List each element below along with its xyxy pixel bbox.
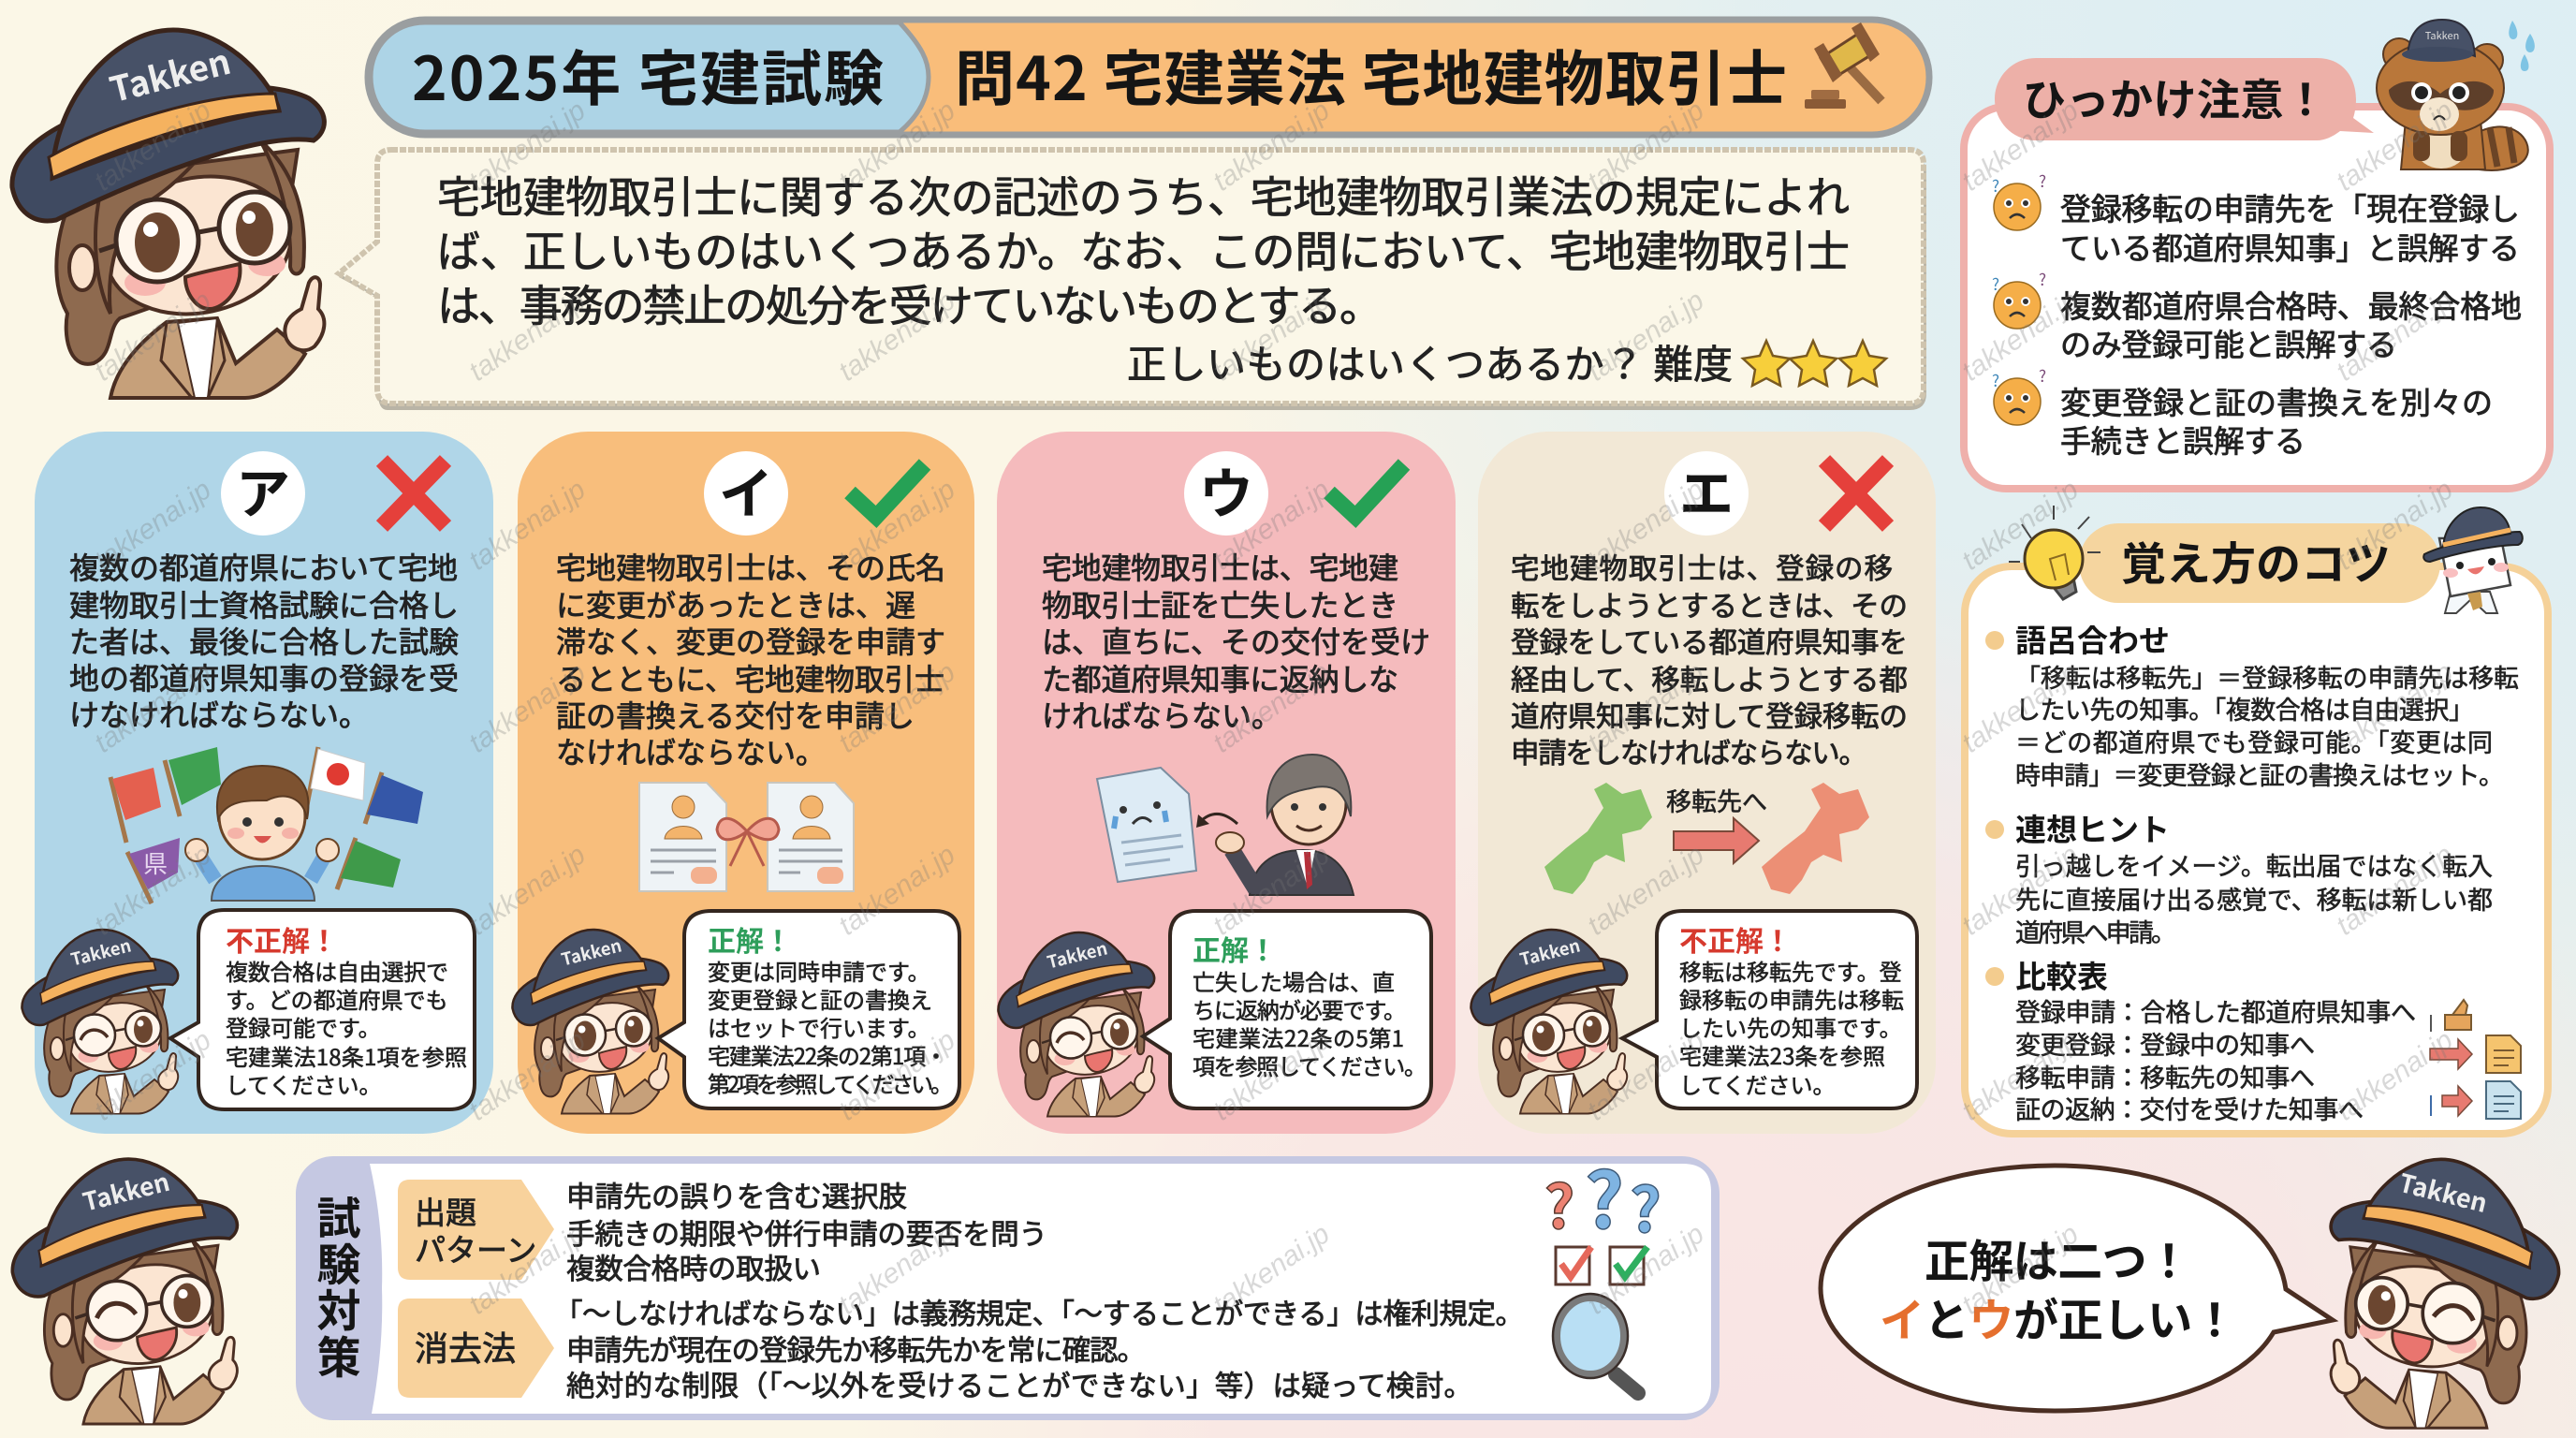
item: trap 1: ている都道府県知事」と誤解する: [2060, 224, 2520, 269]
watermarks: takkenai.jp: [89, 839, 217, 942]
character: bottom-left mascot: Takken: [79, 1162, 173, 1219]
explanation bubble: 不正解！: [1679, 918, 1792, 960]
pattern list: 手続きの期限や併行申請の要否を問う: [566, 1211, 1047, 1253]
mascot: wink: [22, 930, 178, 1114]
statement text: [556, 545, 945, 772]
icon: worried face: ?: [2039, 169, 2046, 192]
explanation bubble: 変更は同時申請です。: [708, 954, 930, 987]
item: trap 3: [1992, 363, 2493, 462]
question text: ば、正しいものはいくつあるか。なお、この問において、宅地建物取引士: [437, 218, 1850, 280]
watermarks: takkenai.jp: [1956, 656, 2085, 759]
watermarks: takkenai.jp: [1208, 1218, 1336, 1321]
vertical heading: 試: [316, 1182, 361, 1247]
tag: elimination: [398, 1299, 554, 1398]
icon: question marks and checkboxes: ?: [1544, 1160, 1574, 1246]
statement text: [69, 545, 459, 735]
watermarks: takkenai.jp: [1208, 285, 1336, 388]
tip: wordplay: [1985, 616, 2519, 792]
icon: worried face: ?: [1992, 271, 1999, 295]
illustration: two certificates with ribbon: [639, 783, 854, 891]
watermarks: takkenai.jp: [89, 656, 217, 759]
illustration: boy with prefectural flags: 県: [143, 845, 168, 880]
icon: worried face: [1992, 169, 2046, 230]
watermarks: takkenai.jp: [1582, 656, 1710, 759]
explanation bubble: [1143, 911, 1431, 1108]
watermarks: takkenai.jp: [833, 656, 961, 759]
tag: question patterns: パターン: [415, 1225, 536, 1270]
item: trap 2: 複数都道府県合格時、最終合格地: [2060, 282, 2522, 327]
icon: gavel: [1805, 22, 1881, 109]
watermarks: takkenai.jp: [1582, 1024, 1710, 1127]
icon: worried face: [1992, 267, 2046, 329]
watermarks: takkenai.jp: [2331, 285, 2459, 388]
statement text: [1511, 546, 1908, 771]
explanation bubble: [170, 910, 475, 1109]
character: top-left mascot: Takken: [104, 34, 235, 112]
watermarks: takkenai.jp: [89, 285, 217, 388]
icon: worried face: ?: [2039, 267, 2046, 290]
explanation bubble: 第2項を参照してください。: [708, 1066, 953, 1099]
mascot: open eyes: [1471, 930, 1627, 1114]
watermarks: takkenai.jp: [1208, 839, 1336, 942]
tag: question patterns: 出題: [415, 1188, 476, 1233]
watermarks: takkenai.jp: [833, 1218, 961, 1321]
watermarks: takkenai.jp: [1208, 656, 1336, 759]
icon: green check: [850, 464, 925, 517]
vertical heading: 策: [316, 1322, 361, 1387]
character: bottom-right mascot: [2331, 1159, 2559, 1428]
statement text: は、直ちに、その交付を受け: [1042, 619, 1430, 662]
statement text: 道府県知事に対して登録移転の: [1511, 694, 1908, 735]
statement text: るとともに、宅地建物取引士: [556, 656, 944, 699]
elimination list: 「～しなければならない」は義務規定、「～することができる」は権利規定。: [554, 1291, 1524, 1332]
question text: は、事務の禁止の処分を受けていないものとする。: [437, 272, 1383, 334]
statement text: けなければならない。: [69, 692, 369, 735]
icon: worried face: ?: [1992, 173, 1999, 197]
mascot: wink: [998, 932, 1154, 1116]
pattern list: [566, 1174, 1047, 1287]
illustration: lost certificate and official: [1097, 755, 1354, 895]
explanation bubble: してください。: [1679, 1067, 1836, 1100]
statement text: た都道府県知事に返納しな: [1042, 656, 1398, 699]
icon: cube mascot: [2423, 507, 2523, 613]
statement text: 登録をしている都道府県知事を: [1511, 620, 1908, 661]
explanation bubble: 正解！: [708, 918, 792, 960]
watermarks: takkenai.jp: [463, 95, 592, 198]
tip: wordplay: したい先の知事。「複数合格は自由選択」: [2015, 690, 2474, 726]
card label エ: [1664, 450, 1749, 536]
statement text: 申請をしなければならない。: [1511, 730, 1867, 771]
tag: elimination: 消去法: [415, 1322, 516, 1371]
question text: 宅地建物取引士に関する次の記述のうち、宅地建物取引業法の規定によれ: [437, 164, 1850, 226]
explanation bubble: す。どの都道府県でも: [226, 982, 448, 1015]
tip: wordplay: ＝どの都道府県でも登録可能。「変更は同: [2015, 723, 2493, 759]
watermarks: takkenai.jp: [1208, 95, 1336, 198]
item: trap 3: 手続きと誤解する: [2060, 417, 2305, 462]
watermarks: takkenai.jp: [463, 285, 592, 388]
statement text: 証の書換える交付を申請し: [556, 693, 915, 736]
vertical heading: 験: [316, 1229, 361, 1294]
panel: exam strategy: [296, 1139, 1720, 1420]
panel: card イ: [512, 432, 974, 1134]
mascot: wink: Takken: [68, 932, 134, 972]
vertical heading: 対: [316, 1275, 361, 1340]
watermarks: takkenai.jp: [1582, 839, 1710, 942]
item: trap 1: 登録移転の申請先を「現在登録し: [2060, 184, 2520, 229]
statement text: 転をしようとするときは、その: [1511, 583, 1908, 624]
tip: comparison table: 移転申請：移転先の知事へ: [2015, 1058, 2315, 1094]
panel: caution traps: [1964, 20, 2550, 489]
illustration: boy with prefectural flags: [110, 747, 423, 903]
icon: red cross: [382, 461, 446, 526]
question text: [437, 164, 1850, 334]
explanation bubble: はセットで行います。: [708, 1010, 930, 1043]
statement text: ければならない。: [1042, 693, 1281, 736]
watermarks: takkenai.jp: [833, 95, 961, 198]
icon: thumb up: [2431, 1000, 2471, 1032]
watermarks: takkenai.jp: [2331, 474, 2459, 577]
mascot: open eyes: Takken: [1517, 932, 1583, 972]
tips heading pill: 覚え方のコツ: [2121, 527, 2391, 593]
item: trap 2: のみ登録可能と誤解する: [2060, 320, 2397, 365]
tip: association hint: 道府県へ申請。: [2015, 913, 2176, 949]
watermarks: takkenai.jp: [89, 1024, 217, 1127]
explanation bubble: [658, 911, 959, 1108]
item: trap 2: [1992, 267, 2522, 365]
title: question: 問42 宅建業法 宅地建物取引士: [955, 32, 1787, 118]
vertical heading: [316, 1182, 361, 1387]
watermarks: takkenai.jp: [1582, 285, 1710, 388]
watermarks: takkenai.jp: [1582, 95, 1710, 198]
statement text: た者は、最後に合格した試験: [69, 619, 459, 662]
mascot: wink: Takken: [1045, 935, 1110, 975]
watermarks: takkenai.jp: [2331, 1024, 2459, 1127]
explanation bubble: ちに返納が必要です。: [1193, 992, 1406, 1025]
watermarks: takkenai.jp: [833, 1024, 961, 1127]
statement text: 建物取引士資格試験に合格し: [69, 582, 459, 625]
statement text: 物取引士証を亡失したとき: [1042, 582, 1398, 625]
watermarks: takkenai.jp: [1956, 285, 2085, 388]
tip: comparison table: 変更登録：登録中の知事へ: [2015, 1025, 2315, 1062]
card label ア: [221, 450, 305, 536]
elimination list: 申請先が現在の登録先か移転先かを常に確認。: [566, 1328, 1146, 1369]
tip: association hint: 先に直接届け出る感覚で、移転は新しい都: [2015, 880, 2493, 917]
panel: card ウ: [997, 432, 1456, 1134]
watermarks: takkenai.jp: [1208, 1024, 1336, 1127]
item: trap 3: 変更登録と証の書換えを別々の: [2060, 378, 2493, 423]
explanation bubble: 宅建業法23条を参照: [1679, 1038, 1885, 1071]
watermarks: takkenai.jp: [1956, 1024, 2085, 1127]
card label ウ: [1184, 450, 1268, 536]
tip: association hint: 引っ越しをイメージ。転出届ではなく転入: [2015, 846, 2493, 883]
panel: memory tips: [1965, 506, 2548, 1134]
title: exam year: 2025年 宅建試験: [412, 32, 884, 118]
explanation bubble: 複数合格は自由選択で: [226, 954, 448, 987]
icon: worried tanuki: Takken: [2425, 28, 2459, 43]
icon: question marks and checkboxes: ?: [1630, 1161, 1661, 1251]
conclusion line 2: イとウが正しい！: [1880, 1284, 2237, 1349]
question speech box: [339, 150, 1926, 410]
icon: arrow to blue document: [2431, 1081, 2521, 1119]
tip: wordplay: 時申請」＝変更登録と証の書換えはセット。: [2015, 756, 2504, 792]
card label イ: [704, 450, 788, 536]
statement text: 経由して、移転しようとする都: [1511, 657, 1908, 698]
watermarks: takkenai.jp: [1956, 1218, 2085, 1321]
explanation bubble: 正解！: [1193, 928, 1277, 969]
watermarks: takkenai.jp: [463, 656, 592, 759]
elimination list: 絶対的な制限（「～以外を受けることができない」等）は疑って検討。: [566, 1363, 1472, 1404]
icon: magnifying glass: [1553, 1294, 1638, 1393]
explanation bubble: [1622, 911, 1917, 1108]
pattern list: 申請先の誤りを含む選択肢: [566, 1174, 907, 1215]
watermarks: takkenai.jp: [463, 474, 592, 577]
tip: comparison table: 証の返納：交付を受けた知事へ: [2015, 1090, 2364, 1126]
illustration: transfer between prefectures: 移転先へ: [1666, 782, 1767, 818]
tip: wordplay: 「移転は移転先」＝登録移転の申請先は移転: [2015, 658, 2519, 695]
caution heading pill: [1995, 58, 2374, 140]
card label ウ: ウ: [1199, 450, 1253, 529]
explanation bubble: 不正解！: [226, 918, 338, 960]
explanation bubble: 亡失した場合は、直: [1193, 964, 1395, 997]
watermarks: takkenai.jp: [1582, 474, 1710, 577]
character: bottom-right mascot: Takken: [2395, 1163, 2492, 1220]
explanation bubble: 録移転の申請先は移転: [1679, 982, 1904, 1015]
caution heading pill: ひっかけ注意！: [2023, 66, 2327, 128]
explanation bubble: 宅建業法18条1項を参照: [226, 1039, 467, 1072]
mascot: open eyes: [512, 930, 668, 1114]
icon: light bulb: [2009, 506, 2100, 599]
explanation bubble: 宅建業法22条の2第1項・: [708, 1038, 947, 1071]
watermarks: takkenai.jp: [1208, 474, 1336, 577]
watermarks: takkenai.jp: [1956, 95, 2085, 198]
statement text: 宅地建物取引士は、登録の移: [1511, 546, 1893, 587]
character: bottom-left mascot: [12, 1159, 237, 1424]
statement text: 地の都道府県知事の登録を受: [69, 655, 459, 698]
item: trap 1: [1992, 169, 2520, 269]
card label イ: イ: [719, 450, 773, 529]
icon: arrow to orange document: [2430, 1035, 2521, 1073]
icon: worried face: [1992, 363, 2046, 425]
tip: wordplay: 語呂合わせ: [2015, 616, 2170, 661]
watermarks: takkenai.jp: [833, 285, 961, 388]
explanation bubble: 宅建業法22条の5第1: [1193, 1020, 1404, 1053]
watermarks: takkenai.jp: [1582, 1218, 1710, 1321]
watermarks: takkenai.jp: [833, 839, 961, 942]
explanation bubble: 登録可能です。: [226, 1010, 381, 1043]
panel: card ア: [22, 432, 493, 1134]
conclusion line 1: 正解は二つ！: [1925, 1225, 2191, 1290]
elimination list: [554, 1291, 1524, 1404]
card label エ: エ: [1679, 450, 1734, 529]
tip: association hint: [1985, 805, 2493, 949]
icon: question marks and checkboxes: [1544, 1139, 1661, 1284]
statement text: に変更があったときは、遅: [556, 582, 915, 625]
watermarks: takkenai.jp: [1956, 474, 2085, 577]
panel: card エ: [1471, 432, 1936, 1134]
tips heading pill: [2079, 523, 2440, 603]
mascot: open eyes: Takken: [559, 932, 624, 972]
tip: comparison table: 比較表: [2015, 952, 2108, 997]
watermarks: takkenai.jp: [89, 474, 217, 577]
tip: comparison table: 登録申請：合格した都道府県知事へ: [2015, 992, 2416, 1029]
watermarks: takkenai.jp: [833, 474, 961, 577]
watermarks: takkenai.jp: [89, 95, 217, 198]
explanation bubble: 変更登録と証の書換え: [708, 982, 932, 1015]
conclusion speech bubble: [1821, 1166, 2333, 1411]
title banner: [368, 20, 1929, 135]
icon: worried tanuki: [2377, 20, 2535, 170]
icon: worried face: ?: [1992, 368, 1999, 391]
tip: association hint: 連想ヒント: [2015, 805, 2170, 850]
statement text: 宅地建物取引士は、宅地建: [1042, 545, 1398, 588]
watermarks: takkenai.jp: [2331, 656, 2459, 759]
watermarks: takkenai.jp: [1956, 839, 2085, 942]
statement text: 滞なく、変更の登録を申請す: [556, 619, 945, 662]
statement text: なければならない。: [556, 729, 826, 772]
icon: red cross: [1824, 461, 1888, 526]
character: top-left mascot: [12, 30, 324, 398]
illustration: transfer between prefectures: [1544, 782, 1869, 894]
icon: green check: [1329, 464, 1404, 517]
watermarks: takkenai.jp: [463, 839, 592, 942]
tip: comparison table: [1985, 952, 2416, 1126]
watermarks: takkenai.jp: [2331, 839, 2459, 942]
card label ア: ア: [236, 450, 290, 529]
pattern list: 複数合格時の取扱い: [566, 1246, 821, 1287]
explanation bubble: したい先の知事です。: [1679, 1010, 1902, 1043]
explanation bubble: してください。: [226, 1067, 382, 1100]
statement text: 宅地建物取引士は、その氏名: [556, 545, 945, 588]
watermarks: takkenai.jp: [463, 1218, 592, 1321]
statement text: 複数の都道府県において宅地: [69, 545, 458, 588]
watermarks: takkenai.jp: [463, 1024, 592, 1127]
explanation bubble: 移転は移転先です。登: [1679, 954, 1902, 987]
icon: three stars: [1743, 341, 1886, 386]
explanation bubble: 項を参照してください。: [1193, 1049, 1427, 1081]
watermarks: takkenai.jp: [2331, 95, 2459, 198]
statement text: [1042, 545, 1430, 736]
tag: question patterns: [398, 1180, 554, 1280]
icon: worried face: ?: [2039, 363, 2046, 387]
icon: question marks and checkboxes: ?: [1585, 1139, 1624, 1251]
question prompt and difficulty: 正しいものはいくつあるか？ 難度: [1127, 333, 1733, 390]
